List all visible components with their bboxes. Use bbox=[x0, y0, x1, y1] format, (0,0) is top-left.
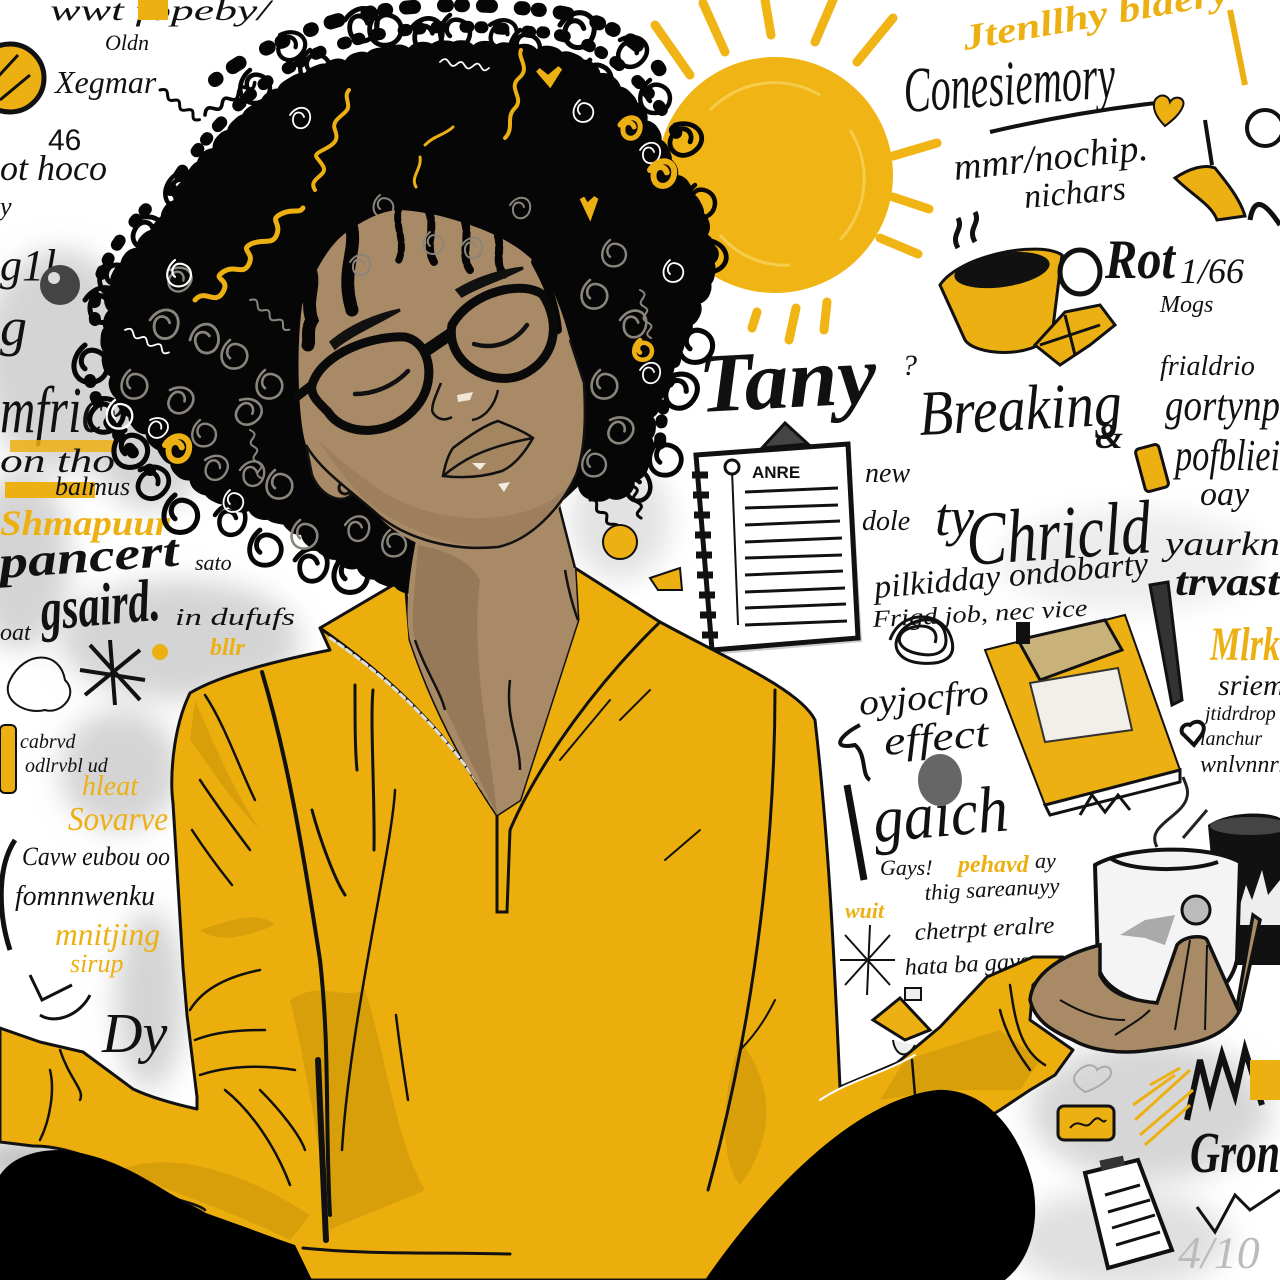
left leg bbox=[0, 1150, 312, 1280]
hair: inner curl highlights bbox=[122, 195, 659, 556]
handwriting: top left: g1l bbox=[0, 241, 56, 290]
handwriting: right middle: lanchur bbox=[1200, 728, 1262, 750]
handwriting: top left: ot hoco bbox=[0, 148, 107, 188]
sweater bbox=[0, 568, 1073, 1280]
star doodles and small icon bbox=[840, 925, 930, 1054]
handwriting: right middle: Gays! bbox=[880, 855, 933, 880]
nose bbox=[432, 383, 498, 420]
handwriting: left middle: balmus bbox=[55, 472, 130, 501]
handwriting: left lower: mnitjing bbox=[55, 916, 160, 952]
handwriting: right middle: oyjocfro bbox=[857, 672, 990, 723]
handwriting: left middle: pancert bbox=[0, 524, 182, 588]
handwriting: top right: 1/66 bbox=[1180, 251, 1244, 291]
handwriting: top right bbox=[901, 0, 1280, 318]
right leg bbox=[705, 1090, 1035, 1280]
closed eyes bbox=[355, 325, 527, 394]
big words: centre right bbox=[696, 329, 1280, 633]
hair: yellow curls bbox=[165, 50, 674, 461]
scribble bbox=[890, 617, 953, 663]
handwriting: top right: mmr/nochip. bbox=[952, 127, 1150, 189]
handwriting: left lower: Dy bbox=[101, 1003, 167, 1065]
face bbox=[295, 205, 585, 550]
yellow book bbox=[985, 615, 1180, 815]
sun bbox=[655, 0, 937, 340]
handwriting: left lower: Cavw eubou oo bbox=[22, 842, 170, 871]
handwriting: left lower: hleat bbox=[82, 771, 139, 802]
handwriting: right middle: jtidrdrop bbox=[1202, 703, 1276, 725]
ear bbox=[306, 444, 351, 499]
handwriting: bottom right bbox=[1058, 1050, 1280, 1278]
handwriting: right middle: effect bbox=[882, 710, 991, 764]
handwriting: left lower: fomnnwenku bbox=[15, 881, 155, 912]
handwriting: right middle: gaich bbox=[870, 772, 1011, 857]
big words: centre right: Frigd job, nec vice bbox=[871, 596, 1088, 633]
handwriting: right middle: wuit bbox=[845, 898, 885, 923]
handwriting: right middle bbox=[840, 618, 1280, 981]
handwriting: left middle: oat bbox=[0, 620, 32, 646]
neck bbox=[408, 490, 578, 815]
handwriting: top right: nichars bbox=[1022, 170, 1127, 216]
icon: clipboard bbox=[1085, 1156, 1172, 1268]
sweater shading bbox=[120, 700, 1040, 1240]
handwriting: top left: y bbox=[0, 192, 12, 221]
big words: centre right: yaurkn bbox=[1161, 526, 1280, 563]
handwriting: right middle: hata ba gays bbox=[904, 948, 1030, 981]
handwriting: left middle: on tho bbox=[0, 443, 115, 480]
big words: centre right: oay bbox=[1200, 476, 1250, 513]
handwriting: left middle: in dufufs bbox=[175, 605, 295, 631]
handwriting: left lower: sirup bbox=[70, 949, 123, 978]
right hand bbox=[1030, 915, 1260, 1052]
handwriting: top right: Rot bbox=[1104, 229, 1176, 291]
icon: coffee cup bbox=[940, 212, 1115, 365]
glasses bbox=[295, 288, 553, 430]
big words: centre right: dole bbox=[862, 506, 910, 537]
big words: centre right: ty bbox=[935, 487, 974, 547]
handwriting: left middle: bllr bbox=[210, 635, 245, 661]
icon: bird bbox=[1175, 120, 1245, 220]
pen bbox=[1150, 582, 1182, 705]
handwriting: top right: Conesiemory bbox=[901, 40, 1118, 126]
steam bbox=[1155, 777, 1207, 847]
handwriting: left middle: sato bbox=[195, 550, 232, 575]
big words: centre right: Breaking bbox=[917, 367, 1123, 449]
handwriting: top left: Oldn bbox=[105, 30, 149, 55]
handwriting: top left: g bbox=[0, 297, 27, 357]
eyebrows bbox=[331, 268, 523, 348]
black mug bbox=[1208, 814, 1280, 965]
handwriting: top left: 46 bbox=[48, 124, 81, 157]
big words: centre right: pilkidday ondobarty bbox=[871, 546, 1150, 606]
notebook: ANRE bbox=[752, 463, 800, 482]
hair: white gaps bbox=[107, 59, 683, 512]
notebook bbox=[692, 423, 862, 654]
handwriting: left middle: Shmapuur bbox=[0, 503, 171, 543]
handwriting: left lower: cabrvd bbox=[20, 731, 77, 753]
icon: small pencil bbox=[1135, 444, 1169, 492]
handwriting: left lower: Sovarve bbox=[68, 801, 168, 838]
handwriting: right middle: chetrpt eralre bbox=[914, 913, 1055, 946]
handwriting: left lower bbox=[0, 725, 170, 1065]
hair bbox=[74, 5, 731, 592]
handwriting: left middle: mfrice bbox=[0, 374, 125, 447]
handwriting: right middle: thig sareanuyy bbox=[924, 873, 1060, 905]
handwriting: bottom right: 4/10 bbox=[1178, 1227, 1260, 1278]
hair: fuzzy edge tufts bbox=[90, 5, 700, 578]
handwriting: left lower: odlrvbl ud bbox=[25, 755, 109, 777]
handwriting: right middle: ay bbox=[1035, 848, 1056, 873]
big words: centre right: & bbox=[1095, 416, 1123, 456]
handwriting: top left bbox=[0, 0, 274, 357]
handwriting: right middle: pehavd bbox=[956, 852, 1030, 878]
handwriting: top left: Xegmar bbox=[53, 64, 157, 100]
big words: centre right: ? bbox=[902, 349, 917, 382]
hair: outer curls bbox=[74, 8, 731, 592]
small icons near hair bbox=[40, 265, 682, 590]
handwriting: left middle bbox=[0, 374, 295, 711]
lips bbox=[443, 421, 533, 477]
white mug bbox=[1095, 850, 1240, 1003]
big words: centre right: Chricld bbox=[963, 485, 1155, 582]
big words: centre right: frialdrio bbox=[1160, 351, 1255, 382]
big words: centre right: Tany bbox=[696, 329, 879, 431]
bangs bbox=[308, 205, 558, 345]
handwriting: left middle: gsaird. bbox=[36, 567, 163, 643]
big words: centre right: trvast bbox=[1175, 559, 1280, 604]
handwriting: top right: Mogs bbox=[1159, 292, 1213, 318]
big words: centre right: new bbox=[865, 458, 910, 489]
